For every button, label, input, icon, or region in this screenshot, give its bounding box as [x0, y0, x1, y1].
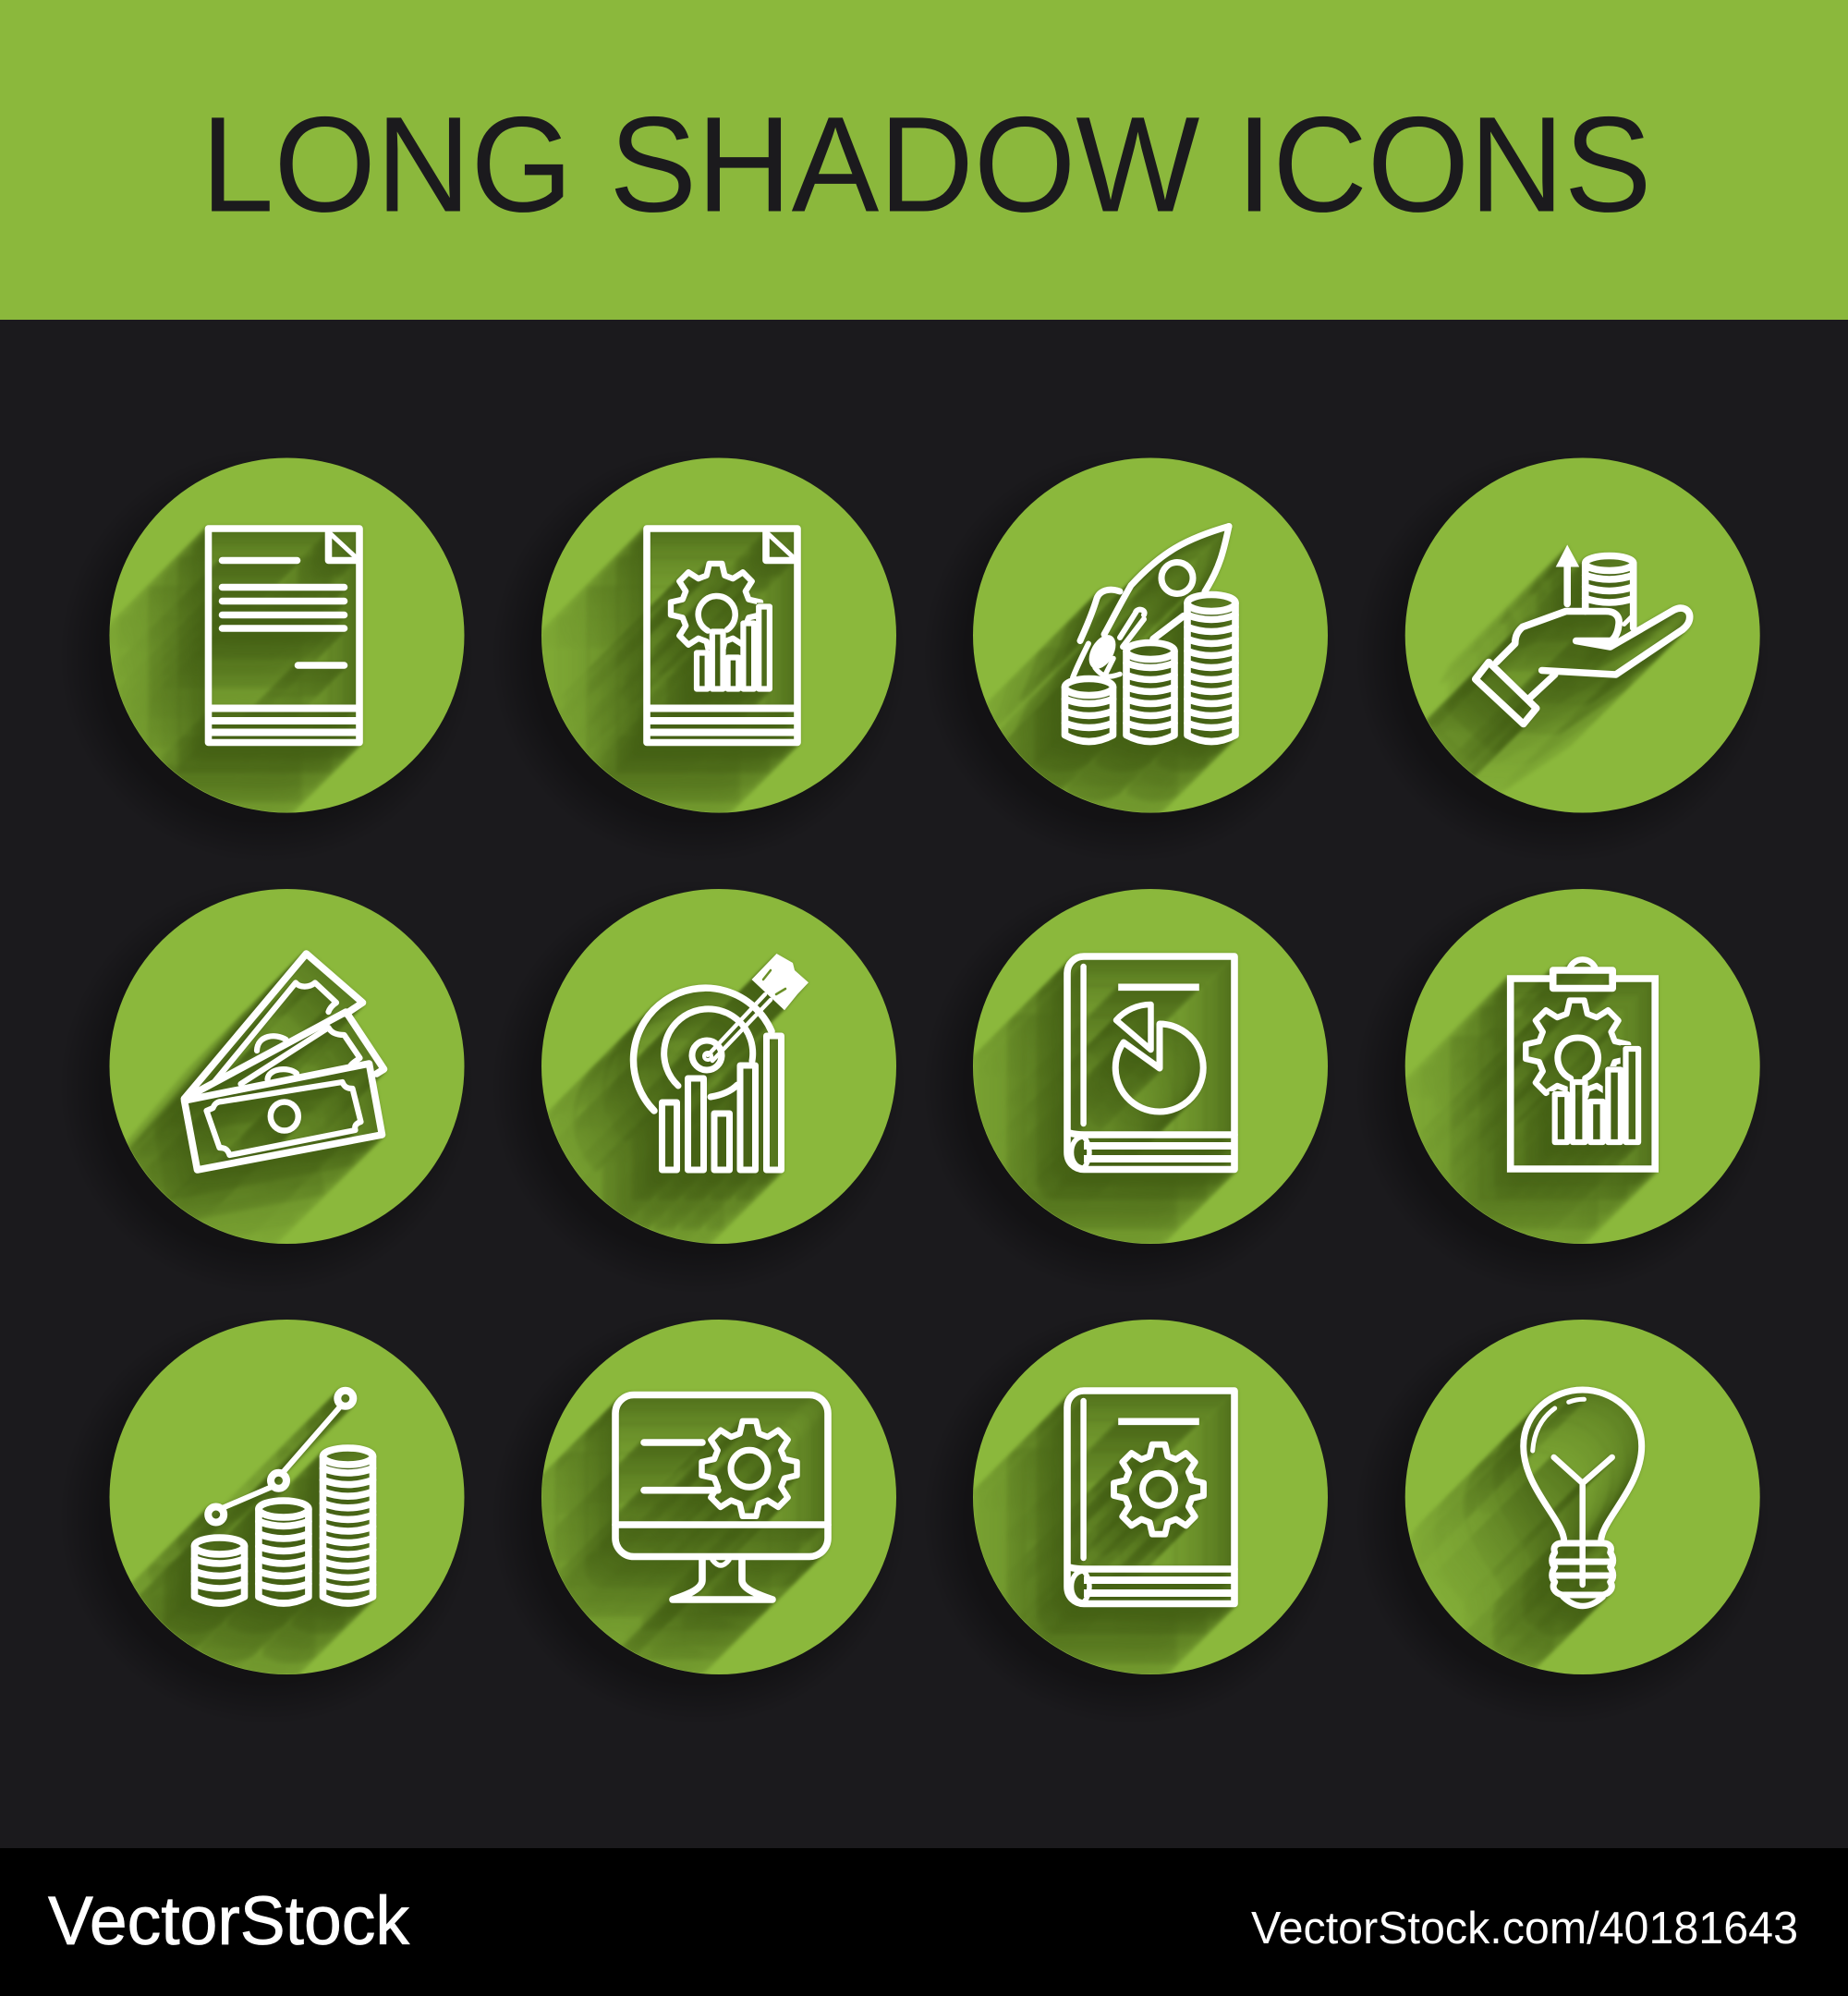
icon: coin stacks with growth line	[194, 1391, 373, 1603]
icon: fan of banknotes	[185, 954, 384, 1170]
panel: report with gear and bars badge	[531, 458, 896, 822]
panel: monitor badge	[491, 1309, 906, 1725]
panel: target and bars badge	[491, 879, 906, 1295]
icon: book with pie chart	[1067, 956, 1234, 1170]
header band	[0, 0, 1848, 320]
panel: rocket and coins badge	[963, 458, 1328, 822]
panel: book with gear badge	[922, 1309, 1338, 1725]
title: LONG SHADOW ICONS	[201, 89, 1652, 240]
panel: document icon badge	[100, 458, 464, 822]
panel: book with pie chart badge	[922, 879, 1338, 1295]
icon: target with arrow and bar chart	[634, 954, 808, 1170]
icon: clipboard with gear and bars	[1511, 959, 1655, 1169]
icon: book with gear	[1067, 1391, 1234, 1604]
panel: clipboard badge	[1355, 879, 1770, 1295]
icon: rocket over coin stacks	[1064, 527, 1235, 741]
icon: hand holding coins with arrow	[1476, 545, 1690, 724]
icon: report with gear and bar chart	[647, 529, 797, 743]
icon: monitor with gear	[615, 1395, 828, 1600]
icon: document	[209, 529, 359, 743]
panel: light bulb badge	[1355, 1309, 1770, 1725]
icon: light bulb	[1524, 1390, 1642, 1606]
panel: banknotes badge	[59, 879, 475, 1295]
panel: growth coins badge	[59, 1309, 475, 1725]
panel: hand holding coins badge	[1395, 458, 1760, 822]
footer image id: VectorStock.com/40181643	[1251, 1904, 1798, 1953]
footer logo text: VectorStock	[48, 1882, 410, 1959]
footer band	[0, 1848, 1848, 1996]
